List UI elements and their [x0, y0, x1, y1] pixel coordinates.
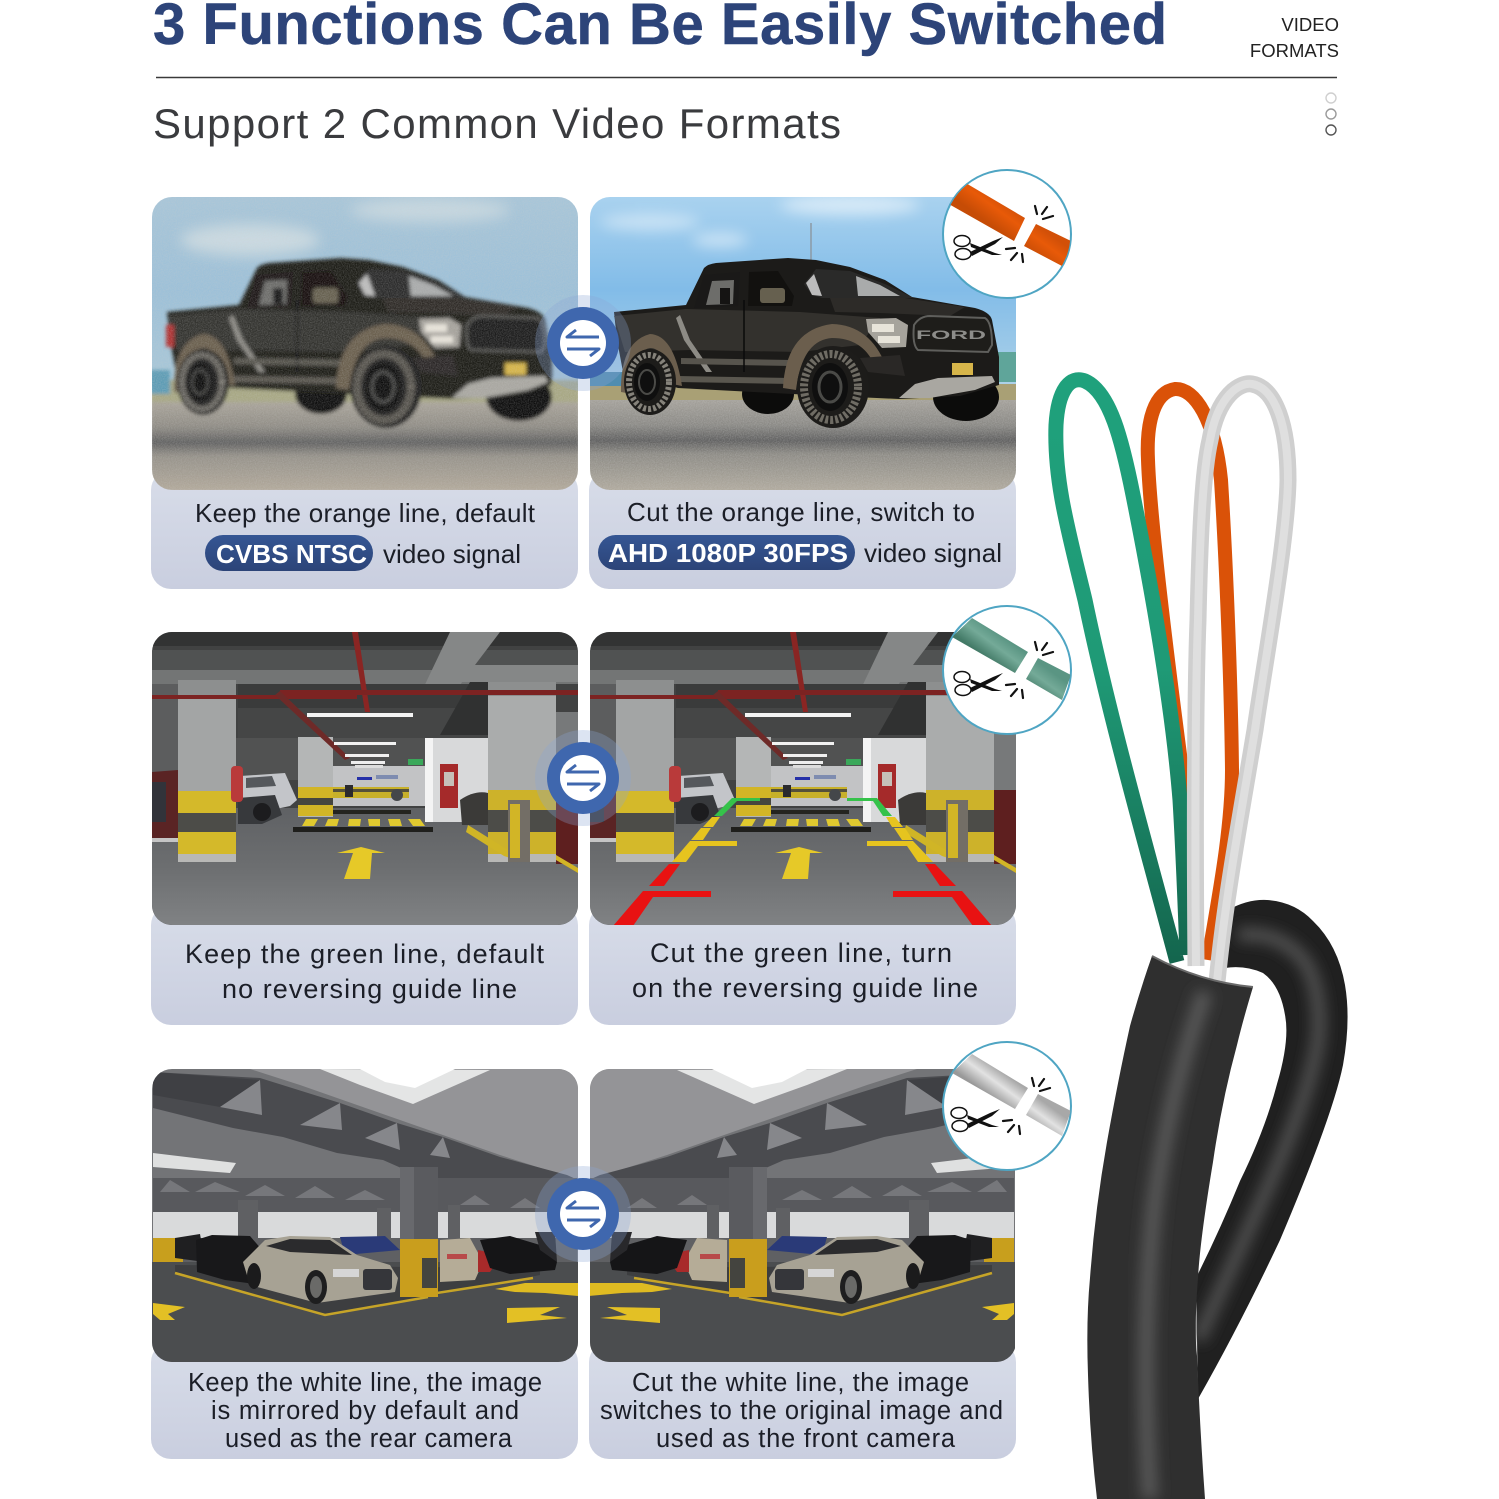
pill: AHD 1080P 30FPS: AHD 1080P 30FPS: [608, 538, 848, 568]
caption: [600, 1369, 1003, 1453]
caption: Cut the orange line, switch to: [627, 497, 975, 527]
icon: switch arrows row 2: [535, 730, 631, 826]
caption: Keep the orange line, default: [195, 498, 536, 528]
caption: switches to the original image and: [600, 1397, 1003, 1425]
panel: cut orange line, AHD 1080P: [589, 195, 1016, 589]
section tag: video formats: VIDEO: [1281, 14, 1339, 35]
photo: sharp truck: [590, 195, 1016, 490]
section tag: video formats: [1250, 14, 1339, 61]
icon: switch arrows row 3: [535, 1166, 631, 1262]
cable loop: [1196, 900, 1348, 1399]
icon: cut orange wire: [943, 170, 1073, 298]
caption: [188, 1369, 542, 1453]
caption: video signal: [383, 539, 521, 569]
white wire: [1195, 384, 1288, 982]
caption: [598, 497, 1002, 570]
caption: Keep the white line, the image: [188, 1369, 542, 1397]
caption: [185, 939, 544, 1004]
subtitle: Support 2 Common Video Formats: [153, 100, 841, 147]
photo: garage mirrored view: [152, 1069, 578, 1362]
icon: switch arrows row 1: [535, 295, 631, 391]
panel: cut white line: [589, 1069, 1016, 1459]
photo: parking garage: [152, 632, 578, 925]
caption: [632, 938, 978, 1003]
caption: [195, 498, 536, 571]
green wire: [1056, 380, 1187, 962]
orange wire: [1148, 389, 1232, 960]
panel: cut green line: [589, 632, 1016, 1025]
photo: blurry noisy truck: [150, 197, 580, 492]
caption: on the reversing guide line: [632, 973, 978, 1003]
photo: parking garage with guide lines: [590, 632, 1016, 926]
photo: garage original view: [589, 1069, 1015, 1362]
photo: sharp truck: FORD: [916, 328, 987, 342]
caption: used as the front camera: [656, 1425, 956, 1453]
section tag: video formats: FORMATS: [1250, 40, 1339, 61]
panel: keep white line: [151, 1069, 578, 1459]
caption: Cut the green line, turn: [650, 938, 952, 968]
caption: is mirrored by default and: [211, 1397, 519, 1425]
cable with three wires: [1056, 380, 1348, 1499]
caption: Cut the white line, the image: [632, 1369, 969, 1397]
caption: Keep the green line, default: [185, 939, 544, 969]
pill: CVBS NTSC: CVBS NTSC: [216, 539, 367, 569]
caption: video signal: [864, 538, 1002, 568]
icon: cut green wire: [943, 606, 1071, 734]
caption: used as the rear camera: [225, 1425, 513, 1453]
panel: keep orange line, CVBS NTSC: [150, 197, 580, 589]
guide lines: [613, 798, 992, 926]
panel: keep green line: [151, 632, 578, 1025]
cable jacket: [1087, 956, 1253, 1499]
pagination dots: [1326, 93, 1336, 135]
icon: cut white wire: [943, 1042, 1071, 1170]
caption: no reversing guide line: [222, 974, 517, 1004]
